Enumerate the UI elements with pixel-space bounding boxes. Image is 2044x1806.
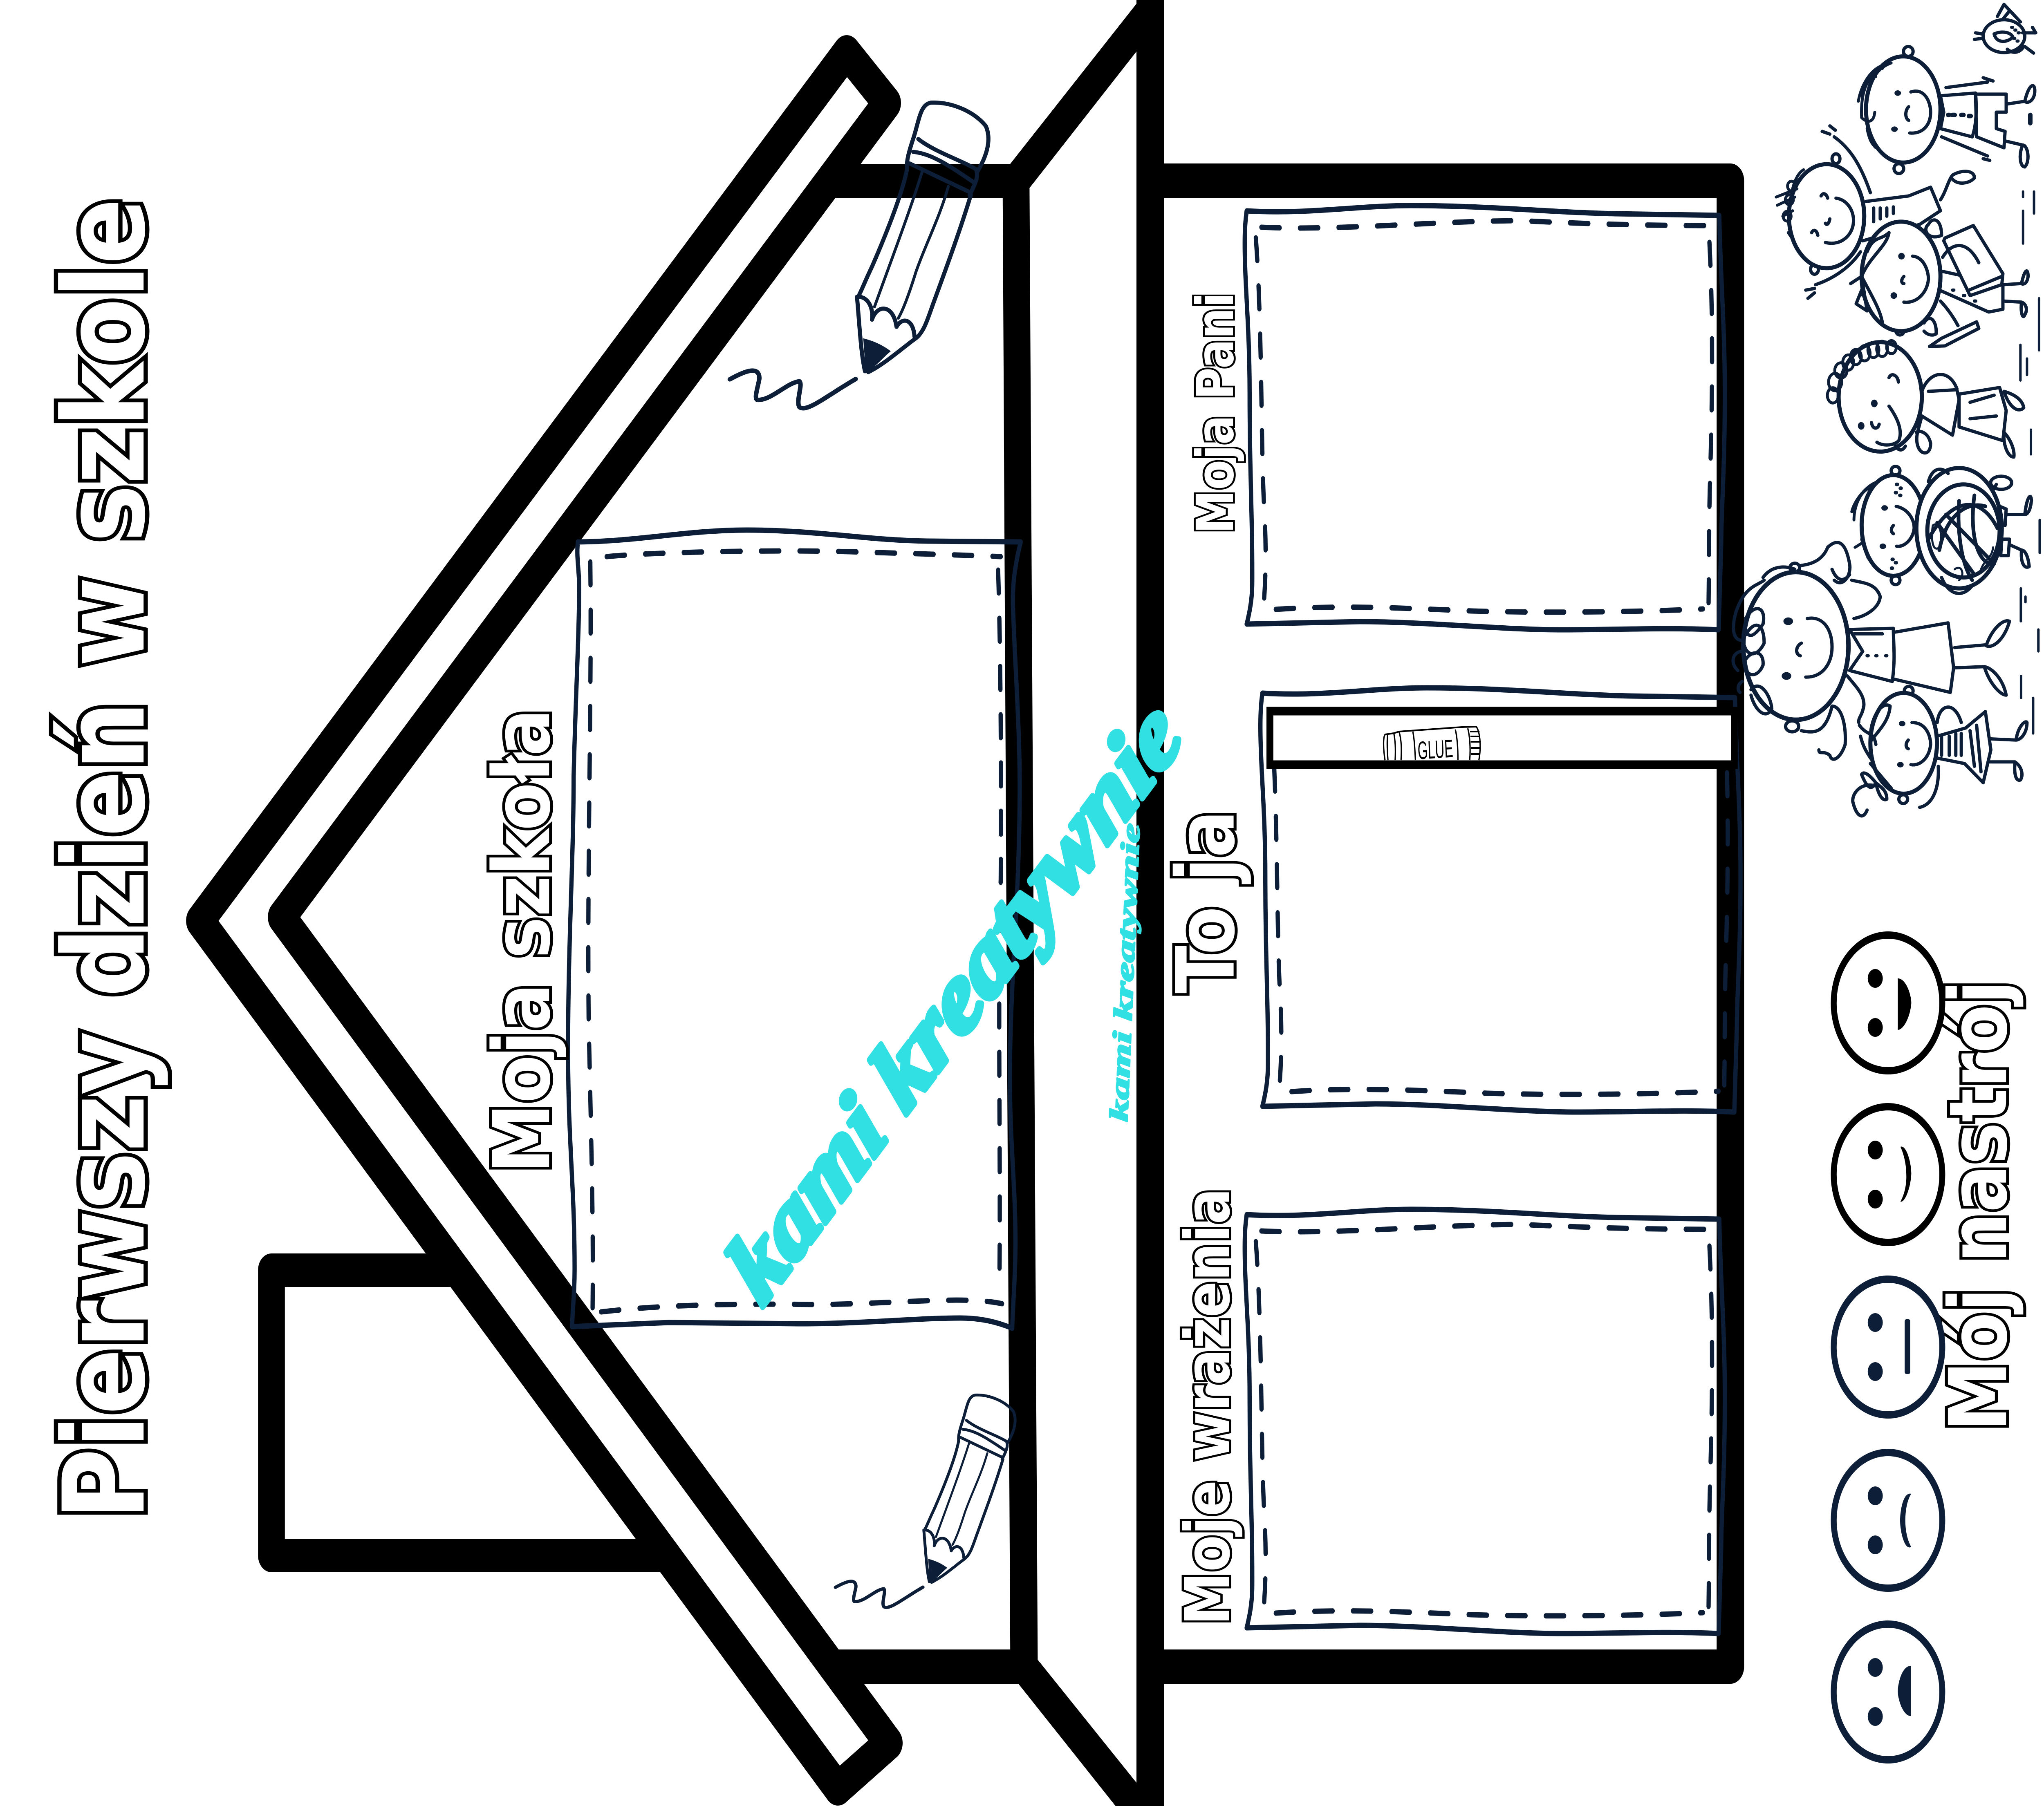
icon: glue stick: GLUE [1417, 734, 1454, 765]
label: Moje wrażenia: Moje wrażenia [1172, 1188, 1244, 1625]
icon: bird [1975, 4, 2036, 53]
icon: very happy face [1834, 935, 1942, 1071]
big child [1733, 542, 2010, 759]
house right wall frame [1150, 181, 1730, 1667]
child 3 with book [1851, 220, 2028, 347]
icon: pencil top [730, 103, 988, 408]
child 4 with curls [1827, 340, 2024, 457]
icon: neutral face [1834, 1279, 1942, 1415]
house left wall and beams [827, 0, 1139, 1806]
house central vertical bar [1136, 0, 1164, 1806]
label: Moja Pani: Moja Pani [1186, 293, 1245, 534]
label: To ja: To ja [1159, 810, 1253, 994]
child 5 with globe [1852, 466, 2031, 593]
label: Moja szkoła: Moja szkoła [477, 709, 568, 1173]
child 2 [1776, 126, 1975, 298]
panel: Moja szkoła [568, 530, 1021, 1328]
chimney [271, 1270, 719, 1555]
glue strip [1270, 711, 1734, 765]
watermark small: kami kreatywnie [1104, 822, 1145, 1122]
icon: pencil bottom [836, 1395, 1015, 1607]
icon: very sad face [1834, 1624, 1942, 1760]
illustration: group of children [1733, 4, 2040, 816]
panel: Moje wrażenia [1245, 1209, 1725, 1634]
icon: sad face [1834, 1452, 1942, 1588]
icon: glue stick [1383, 727, 1481, 765]
watermark large: kami kreatywnie [708, 678, 1199, 1323]
panel: Moja Pani [1245, 206, 1725, 630]
child 1 [1858, 47, 2035, 174]
icon: happy face [1834, 1107, 1942, 1242]
ground ticks [2020, 192, 2040, 734]
child 6 small girl [1853, 686, 2027, 816]
panel: To ja [1260, 688, 1741, 1112]
label: Mój nastrój: Mój nastrój [1932, 980, 2025, 1432]
roof [200, 52, 889, 1788]
